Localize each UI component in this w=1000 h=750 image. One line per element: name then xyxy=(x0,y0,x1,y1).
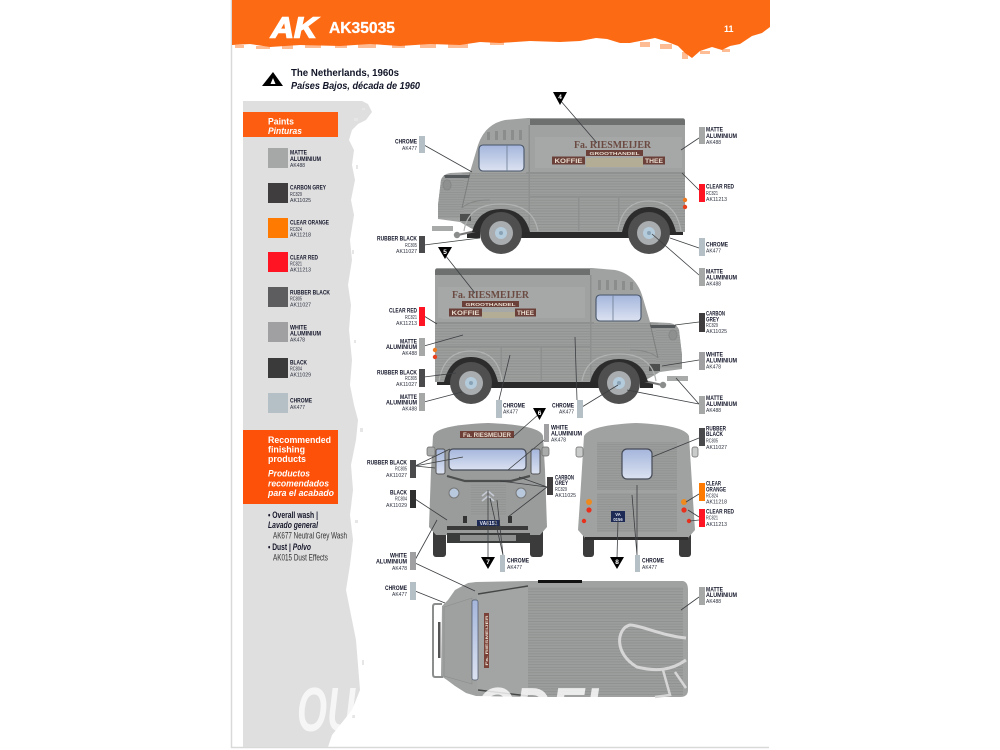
paints header: Pinturas xyxy=(268,126,302,137)
callout: matte aluminium, top view: MATTE xyxy=(706,586,723,594)
callout: matte aluminium, van 2 right lower: AK488 xyxy=(706,408,721,414)
paint: white aluminium: ALUMINIUM xyxy=(290,330,321,338)
heading text spanish: Países Bajos, década de 1960 xyxy=(291,81,420,92)
marker 5: 5 xyxy=(443,249,447,256)
rear plate xyxy=(611,511,625,522)
paint: carbon grey: AK11025 xyxy=(290,198,311,204)
callout: rubber black, rear view: RUBBER xyxy=(706,426,726,432)
callout: chrome, van 1 right: AK477 xyxy=(706,248,721,254)
paint: clear orange xyxy=(268,218,329,238)
callout: rubber black, van 2 left: RUBBER BLACK xyxy=(377,370,417,376)
callout: carbon grey, van 2 right: RC829 xyxy=(706,323,718,329)
callout: clear red, rear view: RC821 xyxy=(706,516,718,522)
van signage xyxy=(442,287,537,319)
panel: recommended finishing products xyxy=(243,430,347,562)
paint: clear red: CLEAR RED xyxy=(290,254,318,262)
callout: rubber black, van 1 left: RC805 xyxy=(405,243,417,249)
callout: carbon grey, front view: RC829 xyxy=(555,487,567,493)
callout: rubber black, van 1 left xyxy=(377,236,480,255)
recommended list: Lavado general xyxy=(268,520,318,530)
paint: clear orange: RC824 xyxy=(290,227,303,233)
callout: rubber black, front view: RC805 xyxy=(395,466,407,472)
paint: matte aluminium: MATTE xyxy=(290,150,307,156)
callout: clear red, van 2 left: RC821 xyxy=(405,315,417,321)
callout: black, front view: RC804 xyxy=(395,496,408,502)
marker 4 xyxy=(553,92,597,143)
paint: rubber black: AK11027 xyxy=(290,302,311,308)
callout: carbon grey, van 2 right: CARBON xyxy=(706,310,725,318)
paint: chrome xyxy=(268,393,312,413)
callout: rubber black, van 2 left xyxy=(377,369,456,388)
rear plate: VA xyxy=(615,512,621,517)
illustration: van side view left xyxy=(432,118,687,254)
paint: black xyxy=(268,358,311,378)
callout: chrome, van 2 door and hub: AK477 xyxy=(559,410,574,416)
callout: white aluminium, front view wipers: AK478 xyxy=(551,438,566,444)
paint: black: AK11029 xyxy=(290,372,311,378)
illustration: van front view xyxy=(427,423,549,557)
recommended list: AK015 Dust Effects xyxy=(273,552,328,562)
callout: white aluminium, front and top view: AK478 xyxy=(392,566,407,572)
roof signage: Fa. RIESMEIJER xyxy=(484,615,489,666)
callout: carbon grey, front view: GREY xyxy=(555,480,568,487)
marker 8 xyxy=(610,520,624,569)
callout: white aluminium, front and top view: WHITE xyxy=(390,552,407,560)
callout: matte aluminium, top view: ALUMINIUM xyxy=(706,592,737,599)
paint: rubber black xyxy=(268,287,330,308)
callout: clear red, rear view: AK11213 xyxy=(706,522,727,528)
marker 7: 7 xyxy=(486,559,490,566)
callout: chrome, van 2 door and hub xyxy=(552,337,618,418)
callout: rubber black, front view: AK11027 xyxy=(386,473,407,479)
callout: clear red, van 1 right: CLEAR RED xyxy=(706,184,734,190)
callout: white aluminium, front and top view xyxy=(376,520,475,591)
callout: white aluminium, front and top view: ALUMINIUM xyxy=(376,558,407,566)
callout: black, front view: BLACK xyxy=(390,490,407,496)
callout: matte aluminium, van 2 left lower: ALUMINIUM xyxy=(386,400,417,406)
logo: AK: AK xyxy=(270,12,319,44)
callout: matte aluminium, van 2 left upper: MATTE xyxy=(400,338,417,346)
callout: rubber black, rear view: BLACK xyxy=(706,431,723,438)
van signage: THEE xyxy=(645,158,664,165)
callout: white aluminium, van 2 right: WHITE xyxy=(706,352,723,358)
callout: black, front view: AK11029 xyxy=(386,503,407,509)
panel: sidebar background xyxy=(243,101,372,747)
van signage: KOFFIE xyxy=(452,310,480,317)
callout: matte aluminium, van 1 right upper: ALUMINIUM xyxy=(706,133,737,140)
roof signage xyxy=(484,613,489,668)
callout: carbon grey, front view xyxy=(500,474,576,517)
callout: chrome, front view xyxy=(490,498,529,572)
callout: clear orange, rear view: CLEAR xyxy=(706,480,721,488)
watermark text right: ODEL xyxy=(475,676,615,745)
scheme heading xyxy=(262,68,420,92)
callout: rubber black, van 1 left: RUBBER BLACK xyxy=(377,236,417,242)
paint: chrome: AK477 xyxy=(290,405,305,411)
callout: chrome, rear view: CHROME xyxy=(642,558,664,564)
watermark: site logo xyxy=(297,625,686,745)
callout: clear orange, rear view: AK11218 xyxy=(706,500,727,506)
callout: matte aluminium, van 1 right upper: AK488 xyxy=(706,140,721,146)
callout: rubber black, front view: RUBBER BLACK xyxy=(367,460,407,466)
callout: carbon grey, van 2 right xyxy=(675,310,727,335)
callout: chrome, front view: CHROME xyxy=(507,558,529,564)
callout: matte aluminium, van 2 left lower xyxy=(386,392,462,412)
callout: rubber black, rear view xyxy=(652,426,727,457)
callout: chrome, van 2 filler cap xyxy=(496,355,525,418)
page frame xyxy=(232,0,769,748)
recommended header: recomendados xyxy=(268,478,329,490)
van signage: GROOTHANDEL xyxy=(590,151,640,156)
callout: carbon grey, front view: AK11025 xyxy=(555,493,576,499)
callout: matte aluminium, van 2 left upper xyxy=(386,335,463,357)
callout: rubber black, front view xyxy=(367,449,463,479)
recommended list xyxy=(268,510,347,562)
callout: chrome, rear view xyxy=(632,485,664,572)
callout: matte aluminium, van 2 right lower: MATTE xyxy=(706,395,723,402)
callout: chrome, rear view: AK477 xyxy=(642,565,657,571)
callout: chrome, van 1 right xyxy=(670,238,728,256)
van signage: Fa. RIESMEIJER xyxy=(452,290,530,301)
van signage: GROOTHANDEL xyxy=(466,302,516,307)
callout: chrome, van 2 door and hub: CHROME xyxy=(552,402,574,410)
callout: matte aluminium, van 1 right upper: MATTE xyxy=(706,126,723,134)
product code: AK35035 xyxy=(329,20,395,37)
callout: white aluminium, front view wipers: ALUMINIUM xyxy=(551,430,582,438)
recommended list: AK677 Neutral Grey Wash xyxy=(273,530,347,540)
recommended header xyxy=(243,430,338,504)
callout: matte aluminium, van 1 right lower: AK488 xyxy=(706,282,721,288)
callout: matte aluminium, top view xyxy=(681,586,737,610)
paint: carbon grey: CARBON GREY xyxy=(290,184,326,192)
callout: rubber black, van 1 left: AK11027 xyxy=(396,249,417,255)
front signage: Fa. RIESMEIJER xyxy=(463,433,512,439)
callout: chrome, top view: AK477 xyxy=(392,592,407,598)
van signage: THEE xyxy=(517,310,535,317)
callout: matte aluminium, van 2 right lower xyxy=(627,378,737,414)
marker 7 xyxy=(481,490,495,569)
marker 4: 4 xyxy=(558,94,562,101)
paint: chrome: CHROME xyxy=(290,398,312,404)
callout: matte aluminium, van 2 left lower: MATTE xyxy=(400,394,417,401)
callout: clear red, rear view: CLEAR RED xyxy=(706,508,734,516)
paint: white aluminium: AK478 xyxy=(290,338,305,344)
callout: clear orange, rear view: ORANGE xyxy=(706,486,726,494)
callout: matte aluminium, top view: AK488 xyxy=(706,599,721,605)
callout: chrome, front view: AK477 xyxy=(507,565,522,571)
callout: chrome, top view: CHROME xyxy=(385,585,407,592)
recommended header: products xyxy=(268,454,306,465)
recommended header: Recommended xyxy=(268,435,331,446)
callout: chrome, van 2 filler cap: CHROME xyxy=(503,402,525,410)
callout: clear orange, rear view xyxy=(686,480,727,506)
paint: rubber black: RUBBER BLACK xyxy=(290,290,330,296)
number plate: VA8151 xyxy=(480,521,498,527)
callout: matte aluminium, van 1 right lower xyxy=(652,234,737,288)
paint: matte aluminium: AK488 xyxy=(290,163,305,169)
callout: white aluminium, van 2 right xyxy=(662,352,737,370)
illustration: van rear view xyxy=(576,423,698,557)
callout: matte aluminium, van 1 right lower: ALUMINIUM xyxy=(706,274,737,282)
callout: chrome, van 1 left: AK477 xyxy=(402,146,417,152)
callout: black, front view xyxy=(386,490,447,520)
callout: rubber black, van 2 left: RC805 xyxy=(405,376,417,382)
callout: matte aluminium, van 2 left lower: AK488 xyxy=(402,406,417,412)
paint: matte aluminium: ALUMINIUM xyxy=(290,156,321,163)
callout: clear red, van 2 left xyxy=(389,307,437,327)
callout: clear red, van 2 left: CLEAR RED xyxy=(389,308,417,314)
van signage: KOFFIE xyxy=(554,158,583,165)
callout: rubber black, van 2 left: AK11027 xyxy=(396,382,417,388)
callout: white aluminium, van 2 right: AK478 xyxy=(706,364,721,370)
callout: clear red, rear view xyxy=(688,508,734,528)
callout: rubber black, rear view: AK11027 xyxy=(706,445,727,451)
callout: white aluminium, front view wipers xyxy=(508,424,582,470)
marker 8: 8 xyxy=(615,559,619,566)
illustration: van top view xyxy=(433,580,688,697)
callout: white aluminium, van 2 right: ALUMINIUM xyxy=(706,358,737,364)
paint: clear red: RC821 xyxy=(290,262,302,268)
callout: matte aluminium, van 1 right lower: MATTE xyxy=(706,268,723,276)
paint: rubber black: RC805 xyxy=(290,296,302,302)
callout: carbon grey, van 2 right: AK11025 xyxy=(706,329,727,335)
callout: chrome, van 2 filler cap: AK477 xyxy=(503,410,518,416)
icon: triangle marker xyxy=(262,72,283,86)
paint: black: RC804 xyxy=(290,366,303,372)
paint: clear red xyxy=(268,252,318,274)
paint: white aluminium xyxy=(268,322,321,344)
callout: clear red, van 1 right xyxy=(682,173,734,203)
callout: clear orange, rear view: RC824 xyxy=(706,494,719,500)
callout: matte aluminium, van 2 left upper: ALUMINIUM xyxy=(386,344,417,351)
paint: clear red: AK11213 xyxy=(290,268,311,274)
rear plate: 0156 xyxy=(613,517,623,522)
callout: rubber black, rear view: RC805 xyxy=(706,438,718,444)
callout: matte aluminium, van 2 right lower: ALUMINIUM xyxy=(706,401,737,408)
marker 6: 6 xyxy=(538,410,542,417)
page number: 11 xyxy=(724,24,734,34)
paints header: Paints xyxy=(268,116,294,128)
heading text: The Netherlands, 1960s xyxy=(291,68,399,79)
paint: black: BLACK xyxy=(290,360,307,366)
paint: matte aluminium xyxy=(268,148,321,169)
header banner xyxy=(232,0,770,59)
callout: clear red, van 2 left: AK11213 xyxy=(396,321,417,327)
recommended header: para el acabado xyxy=(267,488,334,499)
marker 5 xyxy=(438,247,475,293)
paint: white aluminium: WHITE xyxy=(290,324,307,332)
watermark text left: OU xyxy=(297,676,356,745)
marker 6 xyxy=(513,408,546,437)
callout: chrome, van 1 left: CHROME xyxy=(395,138,417,146)
callout: clear red, van 1 right: RC821 xyxy=(706,191,718,197)
paint: carbon grey: RC829 xyxy=(290,192,302,198)
van signage: Fa. RIESMEIJER xyxy=(574,140,652,151)
callout: chrome, van 1 right: CHROME xyxy=(706,242,728,248)
paint: carbon grey xyxy=(268,183,326,204)
paint: clear orange: CLEAR ORANGE xyxy=(290,220,329,226)
callout: white aluminium, front view wipers: WHITE xyxy=(551,424,568,432)
panel: paints xyxy=(243,112,338,413)
callout: clear red, van 1 right: AK11213 xyxy=(706,197,727,203)
recommended list: • Dust | Polvo xyxy=(268,542,311,552)
recommended list: • Overall wash | xyxy=(268,510,318,520)
callout: carbon grey, front view: CARBON xyxy=(555,474,574,482)
recommended header: Productos xyxy=(268,468,310,480)
paint: clear orange: AK11218 xyxy=(290,232,311,238)
callout: chrome, top view xyxy=(385,582,445,603)
callout: matte aluminium, van 2 left upper: AK488 xyxy=(402,351,417,357)
recommended header: finishing xyxy=(268,444,305,456)
van signage xyxy=(552,140,665,167)
callout: matte aluminium, van 1 right upper xyxy=(681,126,737,150)
paints header xyxy=(243,112,338,137)
callout: chrome, van 1 left xyxy=(395,136,472,172)
callout: carbon grey, van 2 right: GREY xyxy=(706,316,719,324)
illustration: van side view right xyxy=(433,268,688,404)
